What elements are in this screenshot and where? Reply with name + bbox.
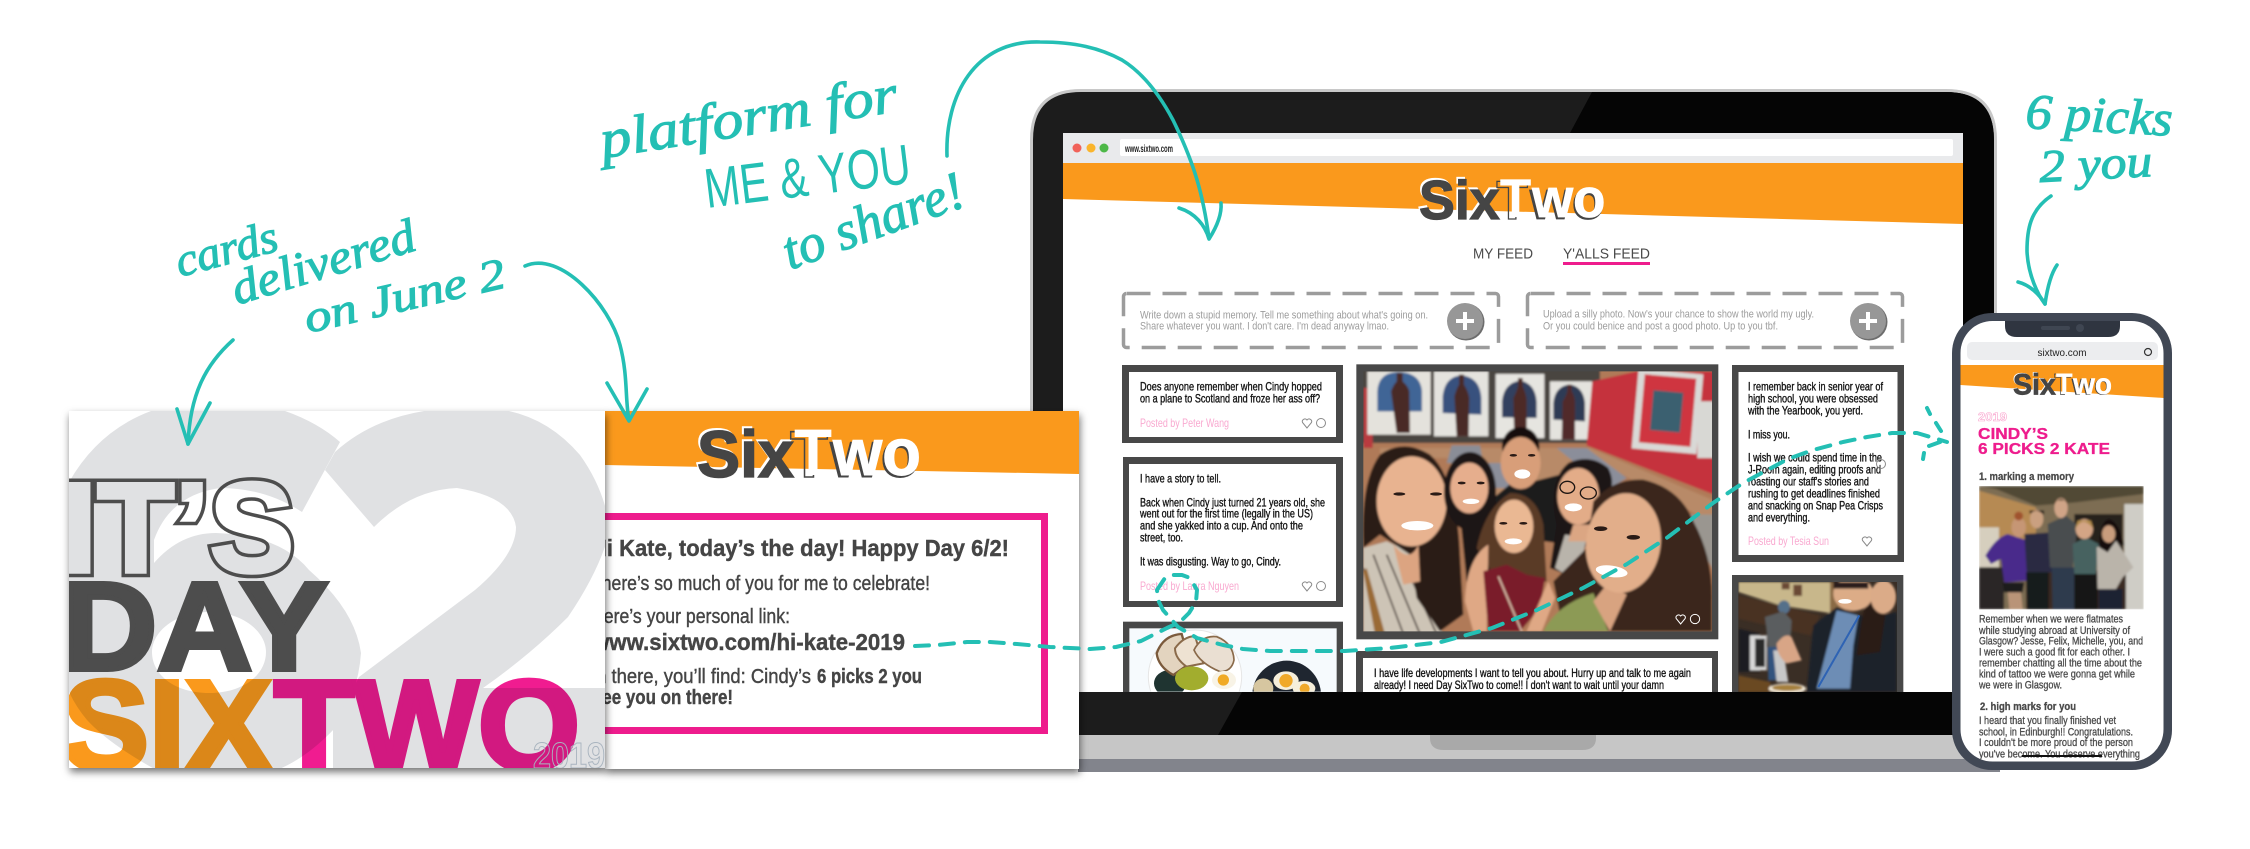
note: platform for me and you to share: to share! [774,160,973,281]
email message [591,535,1009,709]
website screen [1063,163,1963,729]
pick 2 heading: 2. high marks for you [1980,701,2076,713]
feed cards [1122,364,1904,692]
note: 6 picks 2 you: 6 picks [2024,83,2174,147]
arrow: to phone [2018,196,2057,304]
memory upload box: Write down a stupid memory. Tell me something about what's going on. [1140,310,1428,322]
card: Laura Nguyen post: street, too. [1140,530,1183,544]
pick 1 text [1978,614,2143,692]
email header band [605,411,1079,474]
card: Tesia Sun post: rushing to get deadlines finished [1748,486,1880,500]
arrow: to website [947,42,1221,239]
SixTwo logo: T [1496,169,1528,231]
SixTwo logo: T [2054,370,2071,402]
icons: like and comment [1676,614,1700,624]
email message: Hi Kate, today’s the day! Happy Day 6/2! [591,535,1009,561]
card: life developments post: I have life developments I want to tell you about. Hurry up and talk to me again [1374,666,1691,680]
card: Tesia Sun post: and everything. [1748,510,1810,524]
phone url bar [1967,342,2158,360]
photo upload box: Or you could benice and post a good photo. Up to you tbf. [1543,320,1778,332]
note: platform for me and you to share: platform for [591,63,902,171]
big grey 62 [60,400,610,772]
card: Laura Nguyen post [1123,457,1343,607]
phone notch [2005,321,2120,337]
pick 2 text: I couldn't be more proud of the person [1979,737,2133,749]
pick 1 text: Glasgow? Jesse, Felix, Michelle, you, and [1979,636,2143,648]
note: 6 picks 2 you: 2 you [2038,135,2153,192]
card: Laura Nguyen post: went out for the first time (legally in the US) [1139,506,1313,520]
pick 2 text: I heard that you finally finished vet [1979,715,2116,727]
email message: There’s so much of you for me to celebrate! [591,573,930,595]
card: life developments post [1356,651,1718,692]
phone page title: 6 PICKS 2 KATE [1978,441,2110,458]
feed tabs [1473,246,1650,265]
greeting card [60,400,610,798]
laptop base [1078,735,2000,772]
phone group photo [1979,486,2144,609]
card: Peter Wang post: Does anyone remember when Cindy hopped [1140,380,1322,394]
card: group selfie photo [1356,364,1718,639]
pick 1 text: Remember when we were flatmates [1979,614,2123,626]
card: Tesia Sun post [1732,365,1904,562]
feed tabs: Y'ALLS FEED [1563,246,1650,262]
email message: www.sixtwo.com/hi-kate-2019 [591,629,905,655]
feed tabs: MY FEED [1473,246,1533,262]
SixTwo logo: wo [1529,169,1605,231]
note: platform for me and you to share: ME & YOU [701,132,914,220]
phone orange header [1960,365,2164,398]
card: Tesia Sun post: roasting our staff's stories and [1748,474,1869,488]
SixTwo logo: T [790,417,828,491]
SixTwo logo: Six [695,415,792,489]
headline: DAY: DAY [62,558,328,696]
card: Tesia Sun post: I remember back in senior year of [1748,380,1883,394]
phone url bar: sixtwo.com [2038,347,2087,359]
pick 2 text: you've become. You deserve everything [1979,748,2140,760]
card: ramen photo [1123,622,1343,692]
browser bar: www.sixtwo.com [1124,143,1173,155]
laptop [1030,89,2000,772]
email message: Here’s your personal link: [591,606,790,628]
card: Laura Nguyen post: I have a story to tell. [1140,472,1221,486]
card: cafe photo [1732,575,1903,694]
pick 1 text: I were such a good fit for each other. I [1979,646,2130,658]
email message: In there, you’ll find: Cindy’s [591,666,811,688]
card: Tesia Sun post: J-Room again, editing proofs and [1748,462,1881,476]
arrow: to email card [525,263,647,421]
memory upload box: Share whatever you want. I don't care. I'm dead anyway lmao. [1140,320,1389,332]
phone [1952,313,2172,770]
phone page title: 2019 [1978,410,2007,424]
card: Laura Nguyen post: Posted by Laura Nguyen [1140,579,1239,593]
note: platform for me and you to share [591,63,973,281]
browser bar [1063,133,1963,163]
card: Tesia Sun post: with the Yearbook, you yerd. [1747,404,1863,418]
card: life developments post: already! I need Day SixTwo to come!! I don't want to wait until your damn [1374,678,1664,692]
note: cards delivered on June 2: delivered [225,209,423,316]
pick 1 text: while studying abroad at University of [1978,625,2131,637]
SixTwo logo: wo [829,417,920,491]
card: Tesia Sun post: I miss you. [1748,428,1790,442]
SixTwo logo: Six [2012,369,2055,401]
pick 1 text: kind of tattoo we were gonna get while [1979,668,2135,680]
pick 1 text: we were in Glasgow. [1978,680,2062,692]
pink message frame [575,516,1044,730]
card: Laura Nguyen post: Back when Cindy just turned 21 years old, she [1140,496,1325,510]
SixTwo logo: Six [1419,169,1500,231]
card: Peter Wang post: Posted by Peter Wang [1140,416,1229,430]
phone page title [1978,412,2110,454]
photo upload box [1528,294,1902,348]
card: Tesia Sun post: Posted by Tesia Sun [1748,534,1829,548]
laptop bezel [1030,89,1997,735]
SixTwo logo: wo [1531,167,1605,229]
note: cards delivered on June 2: on June 2 [299,249,510,343]
note: 6 picks 2 you [2024,83,2174,192]
email message: 6 picks 2 you [817,666,922,688]
card: Tesia Sun post: I wish we could spend time in the [1748,450,1882,464]
SixTwo logo: Six [2013,370,2056,402]
SixTwo logo [2012,372,2112,396]
arrow: to greeting card [177,340,233,444]
SixTwo logo: wo [2072,369,2112,401]
year 2019: 2019 [533,735,605,776]
phone page title: CINDY’S [1978,426,2048,443]
memory upload box [1124,294,1498,348]
faces detail [1393,454,1640,579]
headline: IT'S: IT’S [62,457,294,600]
note: cards delivered on June 2 [169,209,510,343]
pick 2 text [1979,715,2140,760]
SixTwo logo: T [1500,167,1531,229]
pick 2 text: school, in Edinburgh!! Congratulations. [1979,726,2133,738]
email message: See you on there! [591,687,733,709]
email card [575,411,1079,769]
card: Peter Wang post: on a plane to Scotland and froze her ass off? [1140,392,1320,406]
headline: SIX: SIX [62,654,272,798]
card: Peter Wang post [1122,365,1343,443]
SixTwo logo: T [2056,369,2073,401]
card: Tesia Sun post: and snacking on Snap Pea Crisps [1748,498,1883,512]
SixTwo logo: Six [1417,167,1498,229]
card: Laura Nguyen post: and she yakked into a cup. And onto the [1140,518,1303,532]
dashed link line [915,408,1947,651]
SixTwo logo: wo [832,415,921,489]
SixTwo logo: T [794,415,832,489]
headline: TWO: TWO [274,654,580,798]
pick 1 heading: 1. marking a memory [1979,471,2075,483]
SixTwo logo [1417,167,1605,231]
orange header [1063,163,1963,224]
note: cards delivered on June 2: cards [169,210,283,287]
photo upload box: Upload a silly photo. Now's your chance to show the world my ugly. [1543,308,1814,320]
card: Laura Nguyen post: It was disgusting. Way to go, Cindy. [1140,554,1281,568]
home indicator [2022,755,2102,757]
SixTwo logo: wo [2071,370,2112,402]
SixTwo logo: Six [697,417,794,491]
pick 1 text: remember chatting all the time about the [1979,658,2142,670]
SixTwo logo [695,415,921,491]
card: Tesia Sun post: high school, you were obsessed [1748,392,1878,406]
